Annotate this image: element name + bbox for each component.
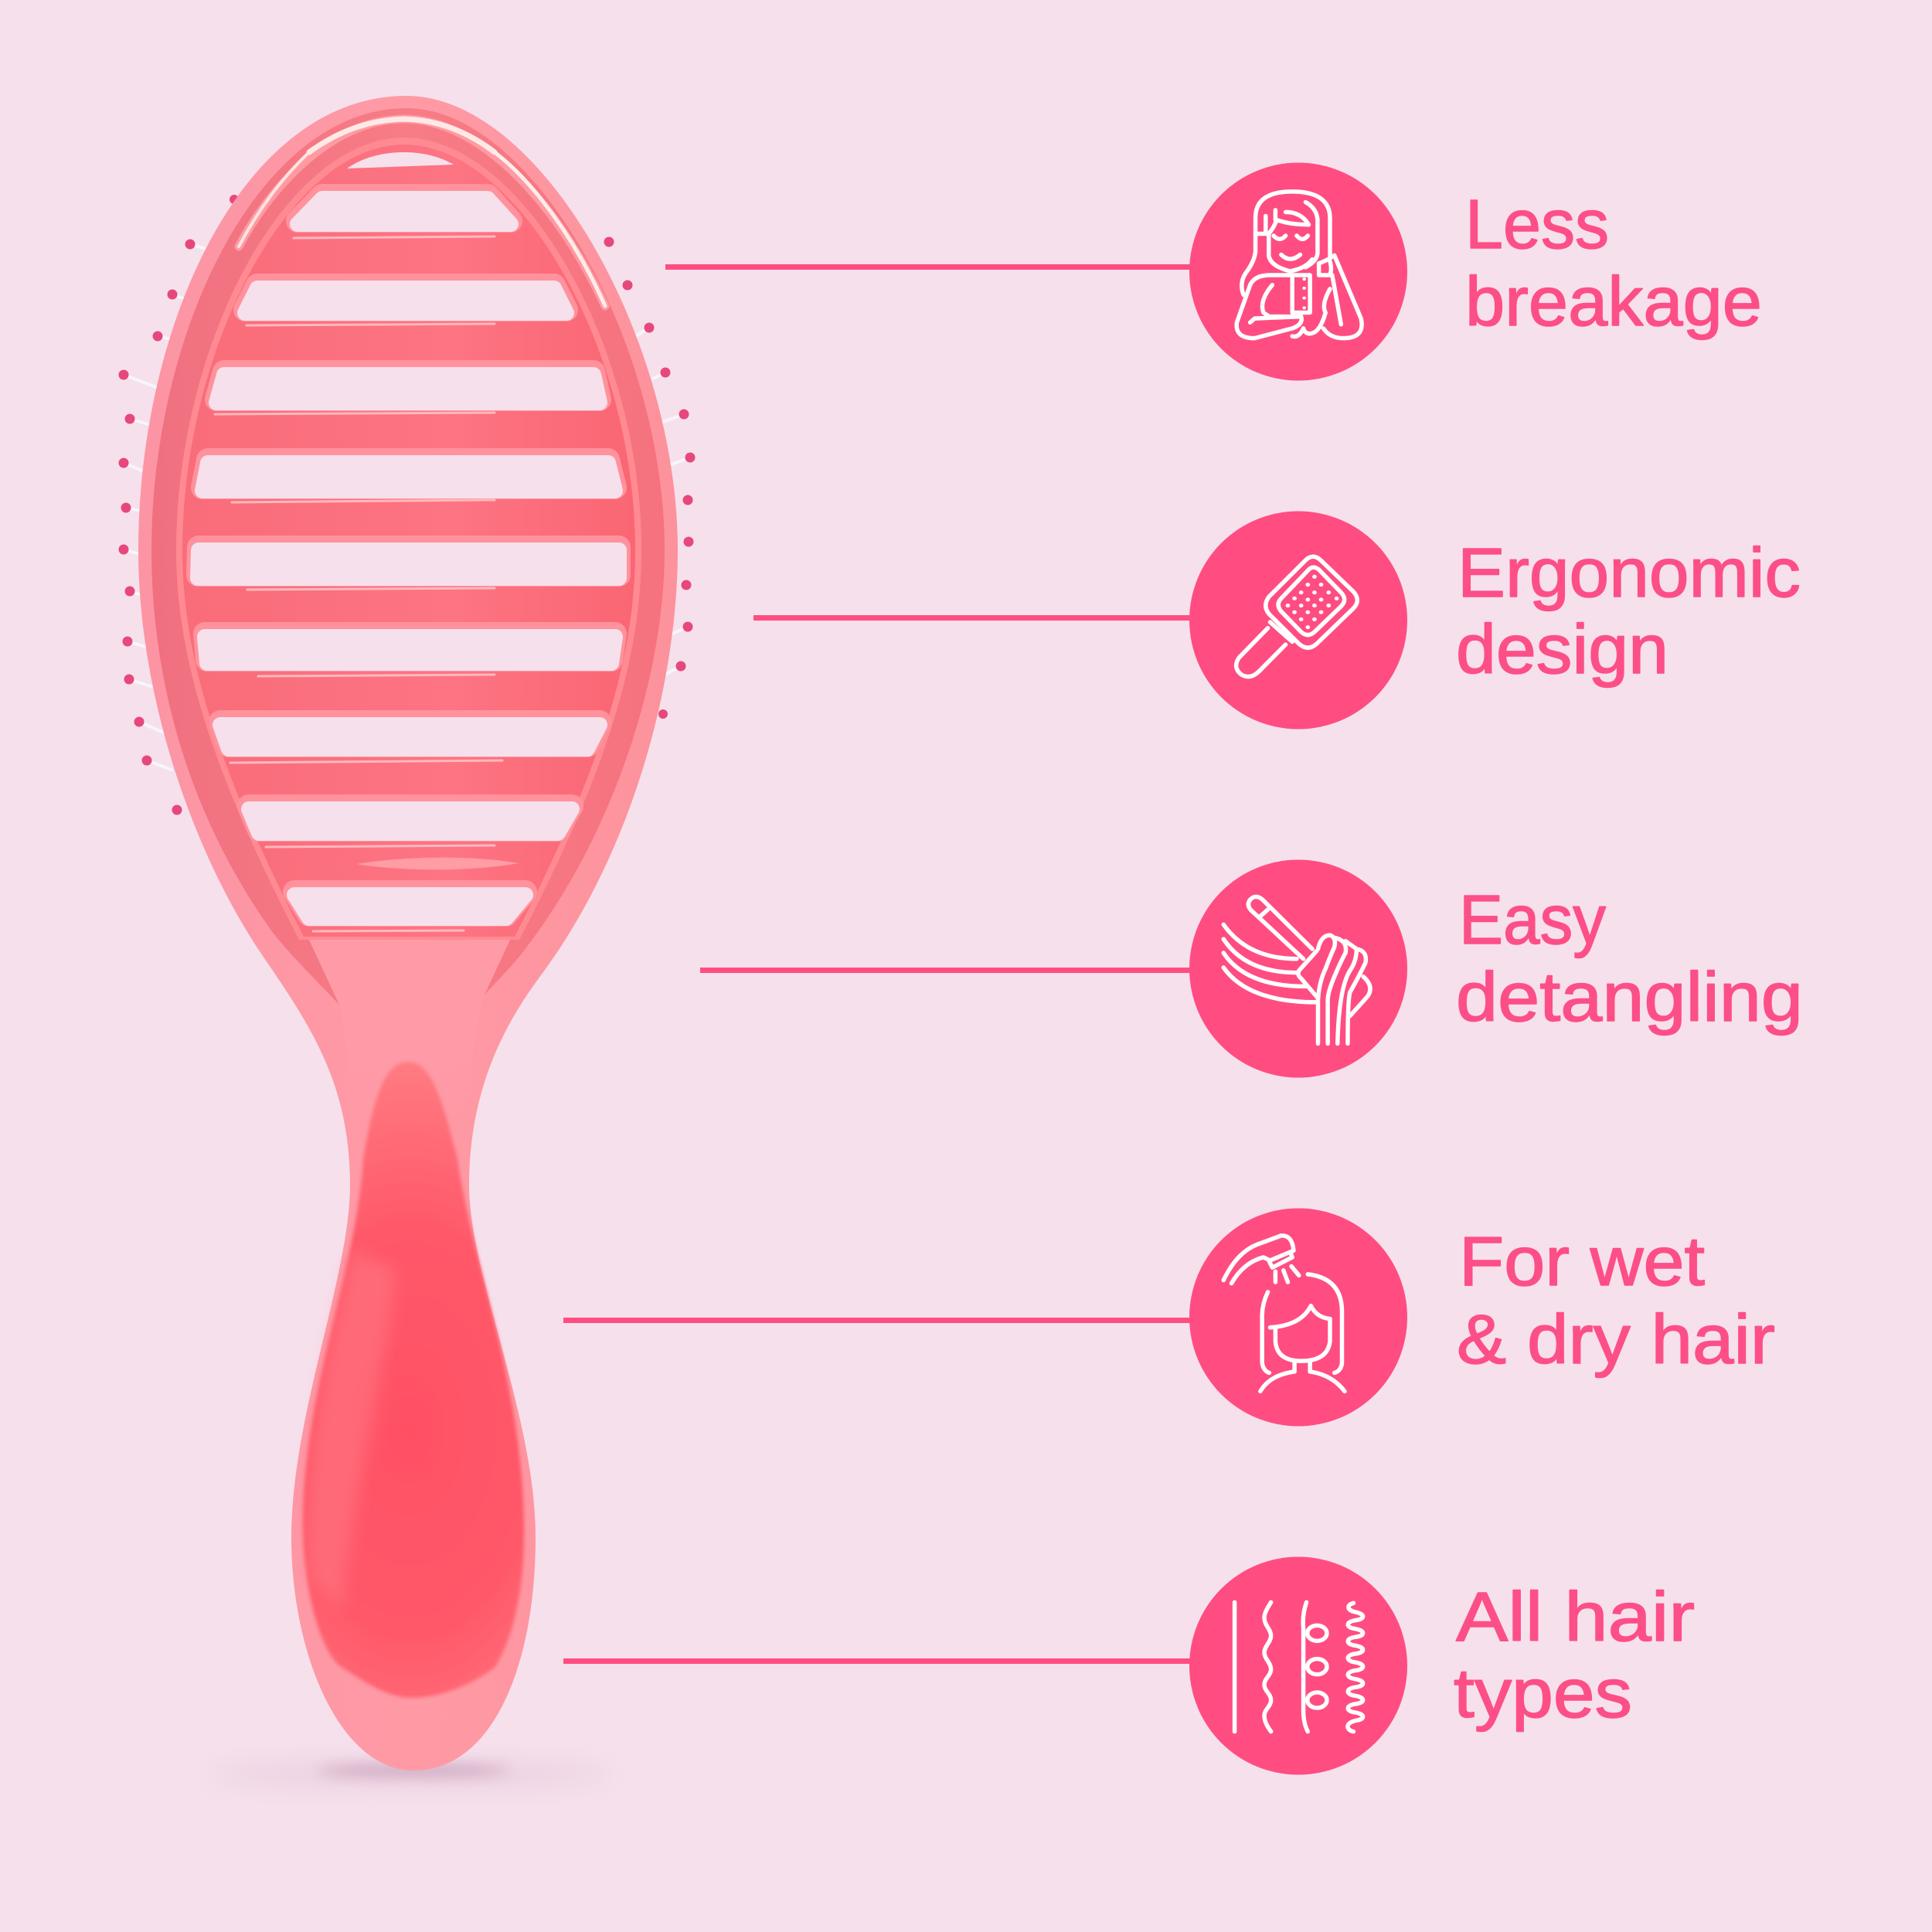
brush body [138,96,678,1770]
connector line 5 [563,1658,1191,1664]
neck plate [309,940,510,1136]
label: detangling [1456,959,1803,1036]
circle badge [1189,859,1407,1077]
label: breakage [1465,264,1762,341]
connector line 2 [753,615,1191,621]
feature: less breakage [1189,162,1762,380]
icon: hand combing hair [1223,896,1370,1043]
lens highlight on lower bar [357,858,519,869]
label: & dry hair [1457,1301,1775,1379]
slot rims [198,196,619,915]
label [1465,186,1762,341]
label: For wet [1459,1223,1705,1301]
feature: easy detangling [1189,859,1803,1077]
label [1457,1223,1775,1379]
circle badge [1189,512,1407,730]
brush head dark ring [151,108,665,1005]
bars panel [182,145,635,937]
label [1454,1579,1695,1733]
handle inner colour [303,1062,524,1698]
slots between bars [198,199,619,918]
label: Ergonomic [1458,535,1801,612]
circle badge [1189,162,1407,380]
head top gloss highlight [239,119,605,306]
label [1456,882,1803,1036]
brush shadow [209,1762,611,1787]
circle badge [1189,1209,1407,1427]
brush product image [119,96,696,1787]
icon: paddle brush [1236,556,1357,677]
connector line 3 [700,968,1191,973]
label: types [1454,1655,1632,1733]
feature: wet and dry hair [1189,1209,1775,1427]
inner light strip [176,138,641,940]
label: All hair [1456,1579,1695,1656]
icon: woman with long hair holding brush [1236,192,1362,338]
connector line 4 [563,1318,1191,1323]
feature: all hair types [1189,1556,1695,1774]
label: design [1456,611,1668,689]
bristles [119,195,696,815]
label: Easy [1459,882,1606,959]
bar highlights [215,236,502,931]
connector line 1 [665,264,1191,270]
handle left gloss [308,1252,396,1611]
circle badge [1189,1556,1407,1774]
top grip slot [347,152,454,168]
feature: ergonomic design [1189,512,1801,730]
icon: shower over woman's head [1223,1236,1345,1391]
icon: four hair textures [1235,1602,1363,1732]
label [1456,535,1801,689]
label: Less [1465,186,1609,264]
